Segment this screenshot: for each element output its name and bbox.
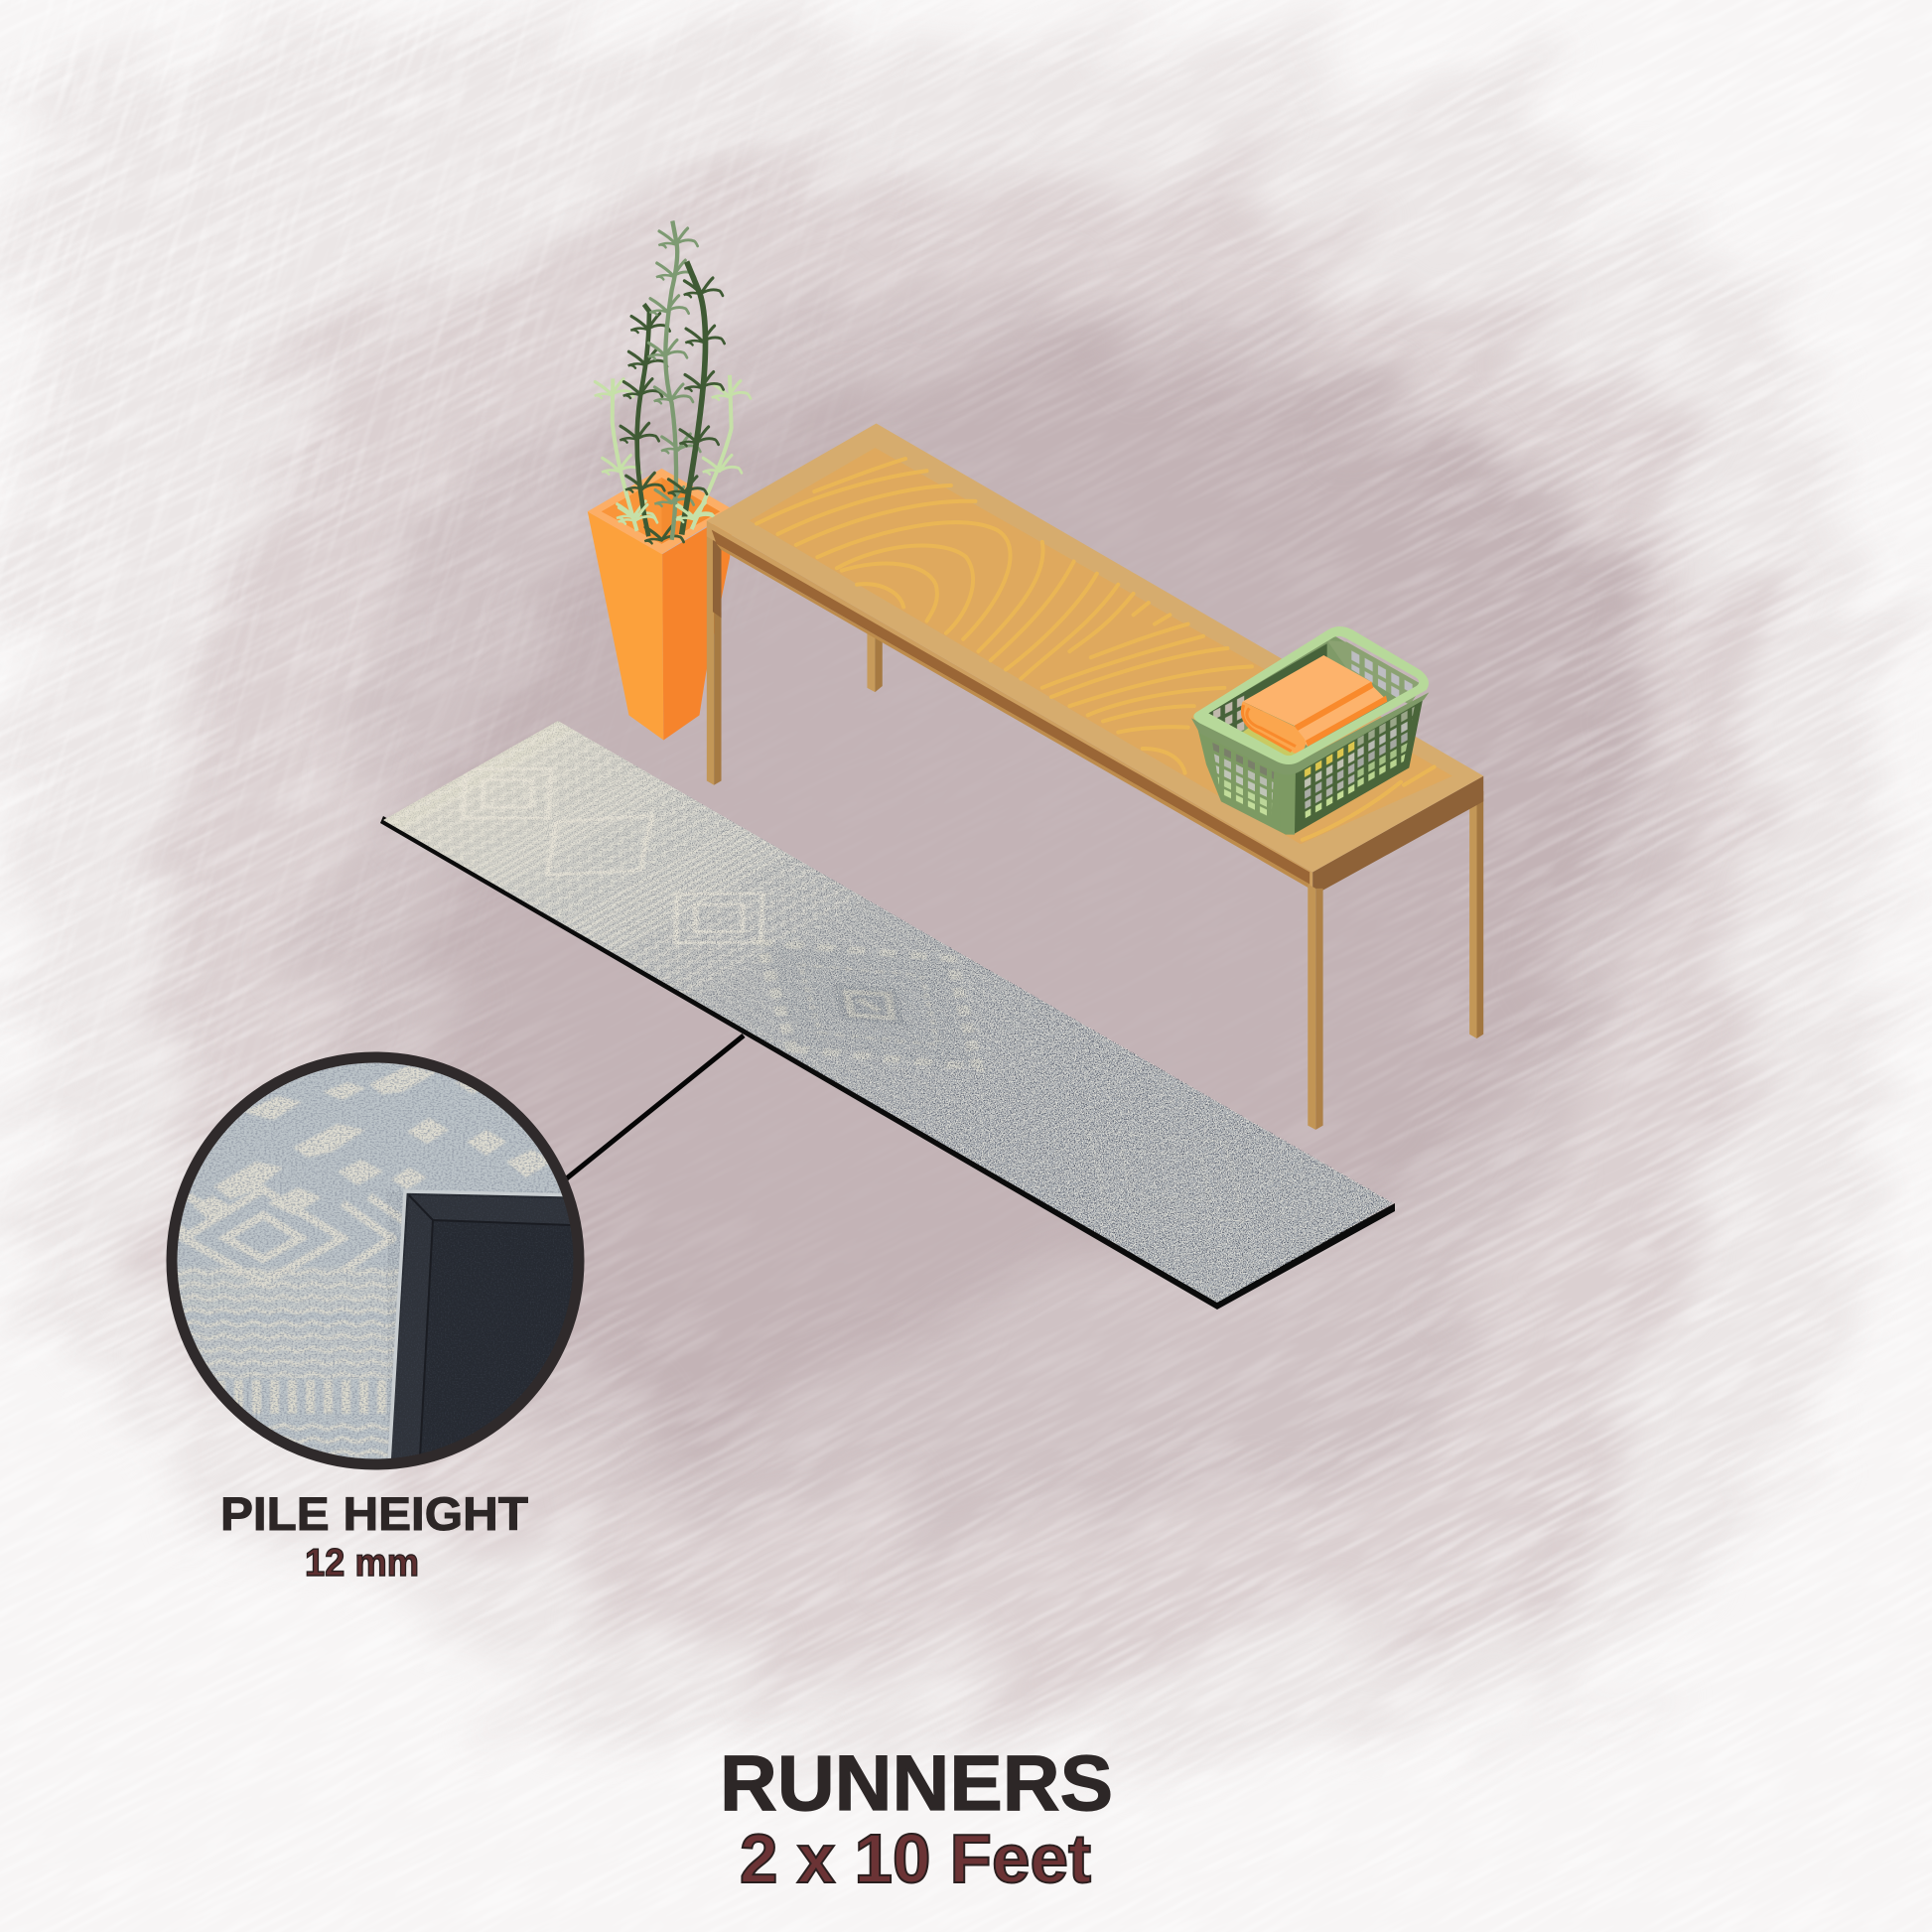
basket interior walls (1199, 635, 1427, 761)
plant pot (588, 469, 734, 740)
light left stem (595, 378, 655, 531)
inset upper cream motifs (194, 1066, 552, 1221)
front leg (1308, 885, 1315, 1130)
wood grain lines (757, 459, 1435, 840)
basket rim (1193, 626, 1429, 764)
value: 12 mm: 12 mm (305, 1542, 419, 1585)
size: 2 x 10 feet: 2 x 10 Feet (740, 1820, 1091, 1897)
pot rim (588, 469, 734, 554)
rug woven pattern (380, 719, 1392, 1303)
inset horizontal woven bands (169, 1267, 407, 1378)
light foreground leaves (619, 503, 715, 524)
light right stem (676, 375, 751, 529)
inset woven texture (169, 1052, 586, 1469)
dark right stem (668, 262, 725, 534)
laundry basket with towels (1191, 626, 1429, 835)
rug black thickness edge (380, 816, 1395, 1310)
rug medallion (754, 938, 985, 1072)
rug speckle texture (377, 715, 1400, 1311)
runner rug (377, 715, 1400, 1311)
table (707, 424, 1483, 1130)
title: runners: RUNNERS (720, 1738, 1113, 1827)
basket corner post (1279, 767, 1296, 835)
pot interior (602, 478, 720, 544)
towels (1239, 655, 1387, 759)
pot right face (662, 511, 734, 740)
long side lip (707, 520, 1312, 891)
inset ring (172, 1057, 579, 1464)
table top surface (707, 424, 1483, 872)
basket lower rim band (1191, 692, 1429, 774)
label: pile height: PILE HEIGHT (220, 1487, 528, 1540)
left leg (707, 527, 714, 785)
connector line from rug to inset (563, 1035, 744, 1181)
mid green stem (648, 220, 700, 540)
basket right face (1294, 698, 1423, 834)
basket left face (1196, 723, 1286, 835)
right end dark edge (1312, 776, 1483, 891)
inner wood panel (750, 448, 1452, 844)
right leg (1469, 797, 1476, 1038)
plant: rosemary stems (595, 220, 751, 543)
pot left face (588, 511, 663, 740)
inset diamond motif (164, 1189, 407, 1283)
folded corner: rug backing (389, 1192, 586, 1479)
table back leg (867, 631, 883, 692)
inset circle: pile height close-up (164, 1052, 586, 1479)
dark left stem (620, 304, 684, 543)
dark apron (712, 530, 1310, 885)
